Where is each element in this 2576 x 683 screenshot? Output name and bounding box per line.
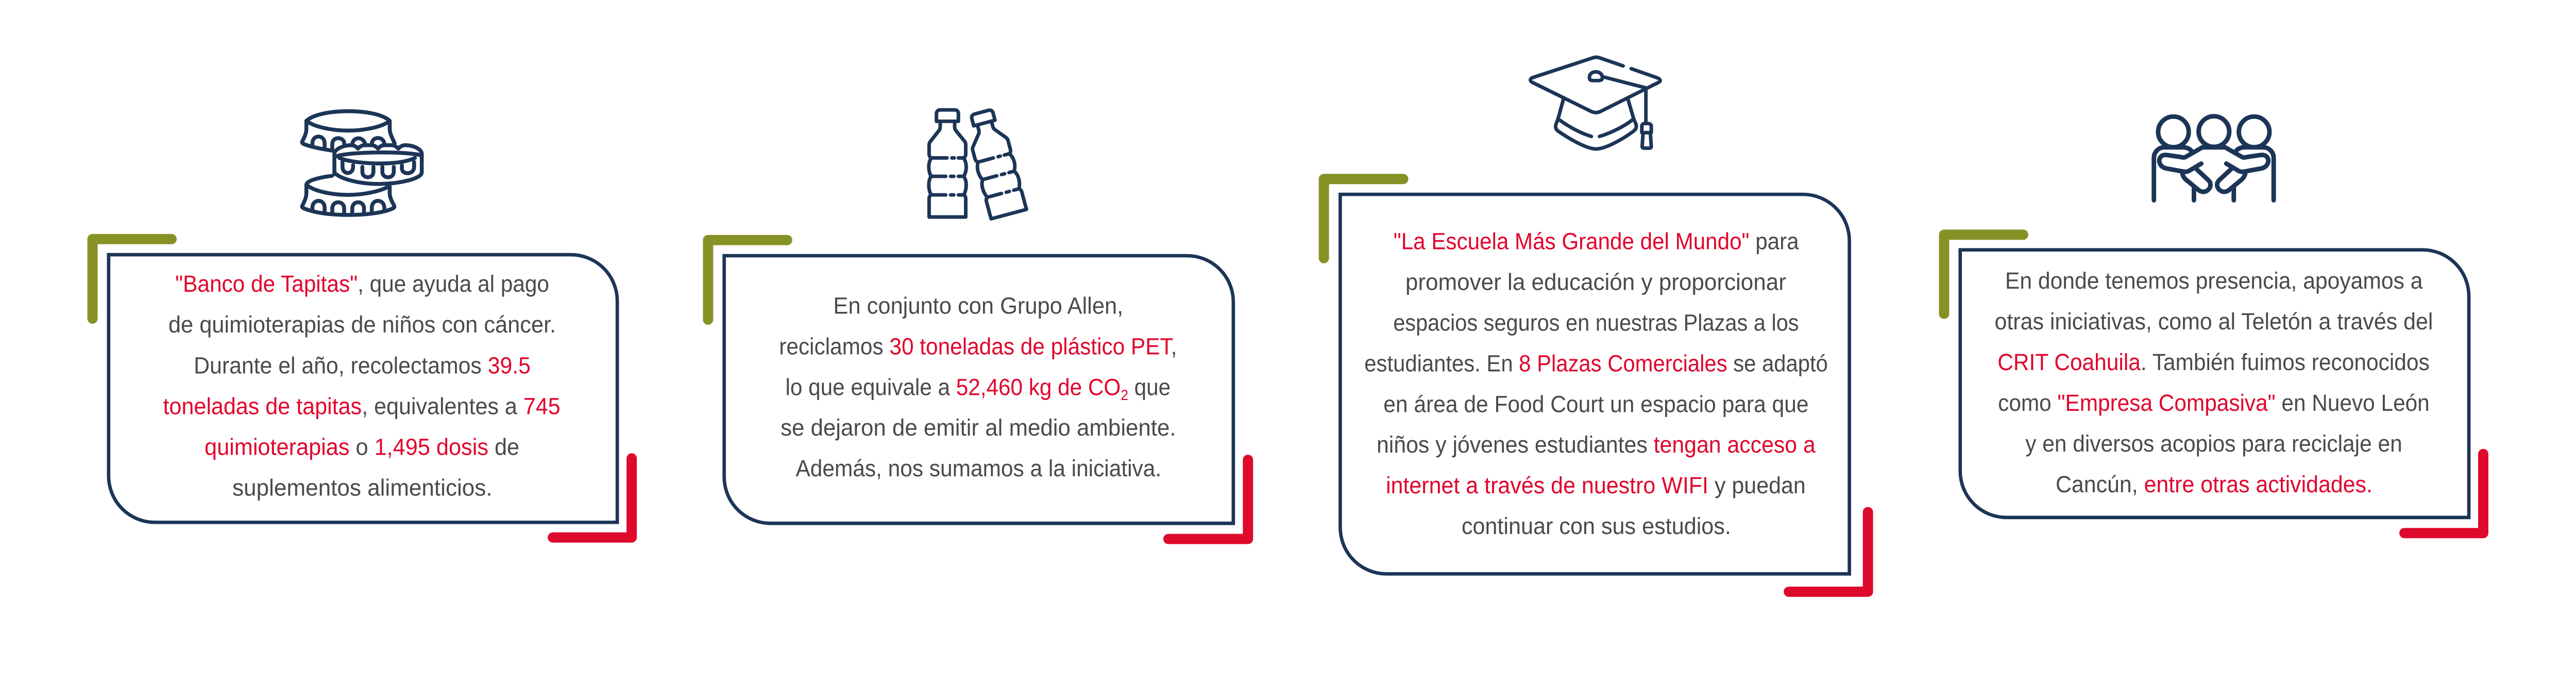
card outline xyxy=(1960,250,2469,518)
icon: three people embracing xyxy=(2154,116,2274,200)
text block: Además, nos sumamos a la iniciativa. xyxy=(795,456,1161,481)
text block: como "Empresa Compasiva" en Nuevo León xyxy=(1998,390,2430,416)
green corner accent xyxy=(93,239,172,319)
panel: La Escuela Más Grande del Mundo xyxy=(1324,57,1868,592)
icon: bottle caps xyxy=(302,111,422,215)
text block: quimioterapias o 1,495 dosis de xyxy=(205,435,519,460)
text block: estudiantes. En 8 Plazas Comerciales se adaptó xyxy=(1364,351,1828,377)
text block xyxy=(163,271,561,501)
green corner accent xyxy=(1324,179,1403,258)
text block: Durante el año, recolectamos 39.5 xyxy=(194,353,531,379)
text block: suplementos alimenticios. xyxy=(232,475,493,501)
text block: de quimioterapias de niños con cáncer. xyxy=(168,312,556,338)
panel: Banco de Tapitas xyxy=(93,111,632,538)
text block: "La Escuela Más Grande del Mundo" para xyxy=(1394,229,1799,255)
text block: en área de Food Court un espacio para que xyxy=(1383,392,1809,418)
text block: otras iniciativas, como al Teletón a través del xyxy=(1995,309,2433,335)
text block: espacios seguros en nuestras Plazas a los xyxy=(1393,310,1799,336)
text block xyxy=(1995,268,2433,498)
text block: toneladas de tapitas, equivalentes a 745 xyxy=(163,393,561,420)
icon: plastic bottles xyxy=(929,107,1027,219)
text block: promover la educación y proporcionar xyxy=(1405,270,1786,295)
text block: "Banco de Tapitas", que ayuda al pago xyxy=(175,271,549,297)
text block: 2 xyxy=(1121,387,1128,403)
red corner accent xyxy=(2404,454,2483,533)
panel: plástico PET xyxy=(708,107,1248,539)
text block: CRIT Coahuila. También fuimos reconocidos xyxy=(1997,349,2430,375)
card outline xyxy=(1340,194,1850,574)
text block: Cancún, entre otras actividades. xyxy=(2056,472,2372,498)
green corner accent xyxy=(708,240,787,320)
text block: que xyxy=(1128,375,1171,401)
text block: reciclamos 30 toneladas de plástico PET, xyxy=(779,334,1177,360)
green corner accent xyxy=(1944,235,2023,314)
card outline xyxy=(724,256,1233,523)
text block: continuar con sus estudios. xyxy=(1462,513,1731,540)
red corner accent xyxy=(553,458,632,538)
red corner accent xyxy=(1789,512,1868,592)
text block: internet a través de nuestro WIFI y puedan xyxy=(1386,473,1806,499)
panel: otras iniciativas xyxy=(1944,116,2483,533)
text block: y en diversos acopios para reciclaje en xyxy=(2025,431,2402,457)
red corner accent xyxy=(1168,460,1248,539)
text block: En donde tenemos presencia, apoyamos a xyxy=(2005,268,2423,294)
text block: lo que equivale a 52,460 kg de CO xyxy=(786,375,1133,401)
card outline xyxy=(109,255,617,522)
icon: graduation cap xyxy=(1530,57,1660,149)
text block xyxy=(779,293,1177,481)
text block: se dejaron de emitir al medio ambiente. xyxy=(781,415,1176,441)
text block: En conjunto con Grupo Allen, xyxy=(833,293,1123,319)
text block: niños y jóvenes estudiantes tengan acceso a xyxy=(1377,432,1816,458)
text block xyxy=(1364,229,1828,540)
